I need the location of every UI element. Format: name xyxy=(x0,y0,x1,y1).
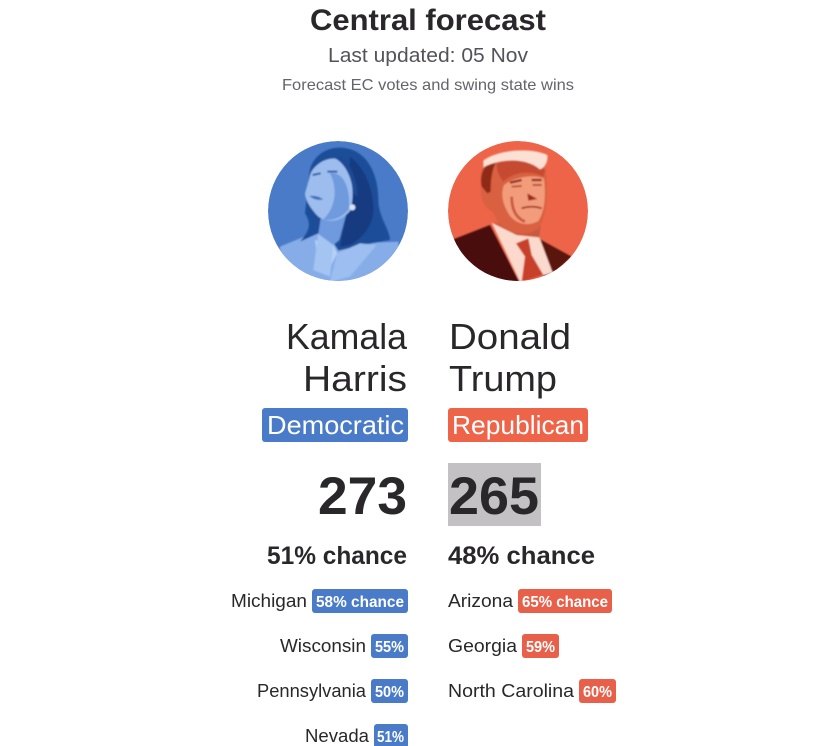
candidate name: Donald Trump xyxy=(449,316,571,399)
swing state: Pennsylvania xyxy=(257,679,408,703)
swing state: Pennsylvania: 50% xyxy=(375,684,404,701)
swing state: Michigan: Michigan xyxy=(231,591,307,611)
win chance: Trump: 48% chance xyxy=(448,542,595,570)
party badge: Republican: Republican xyxy=(452,410,584,440)
swing state: Georgia: Georgia xyxy=(448,636,518,656)
swing state: Wisconsin: 55% xyxy=(375,639,404,656)
swing state: Wisconsin xyxy=(280,634,408,658)
title: Central forecast xyxy=(310,4,546,37)
swing state: Arizona xyxy=(448,589,612,613)
swing state: Arizona: Arizona xyxy=(448,591,514,611)
swing state: Pennsylvania: Pennsylvania xyxy=(257,681,367,701)
swing state: Georgia: 59% xyxy=(526,639,555,656)
win chance: Harris: 51% chance xyxy=(267,542,407,570)
EC votes: Trump: 265 xyxy=(449,467,539,526)
candidate name: Kamala Harris: Harris xyxy=(303,358,407,399)
party badge: Democratic: Democratic xyxy=(267,410,404,440)
swing state: Arizona: 65% chance xyxy=(522,594,608,611)
candidate name: Donald Trump: Donald xyxy=(449,316,571,357)
swing state: North Carolina: 60% xyxy=(583,684,612,701)
swing state: North Carolina xyxy=(448,679,616,703)
candidate name: Donald Trump: Trump xyxy=(449,358,557,399)
swing state: North Carolina: North Carolina xyxy=(448,681,575,701)
portrait: Donald Trump xyxy=(448,141,588,283)
swing state: Michigan: 58% chance xyxy=(316,594,404,611)
swing state: Michigan xyxy=(231,589,408,613)
swing state: Wisconsin: Wisconsin xyxy=(280,636,366,656)
portrait: Kamala Harris xyxy=(268,141,408,283)
swing state: Nevada xyxy=(305,724,408,746)
candidate name: Kamala Harris: Kamala xyxy=(286,316,408,357)
last updated: Last updated: 05 Nov xyxy=(328,45,528,67)
candidate name: Kamala Harris xyxy=(286,316,408,399)
swing state: Nevada: Nevada xyxy=(305,726,370,746)
swing state: Nevada: 51% xyxy=(377,729,404,746)
swing state: Georgia xyxy=(448,634,559,658)
subtitle: Forecast EC votes and swing state wins xyxy=(282,77,574,94)
EC votes: Harris: 273 xyxy=(318,467,407,526)
